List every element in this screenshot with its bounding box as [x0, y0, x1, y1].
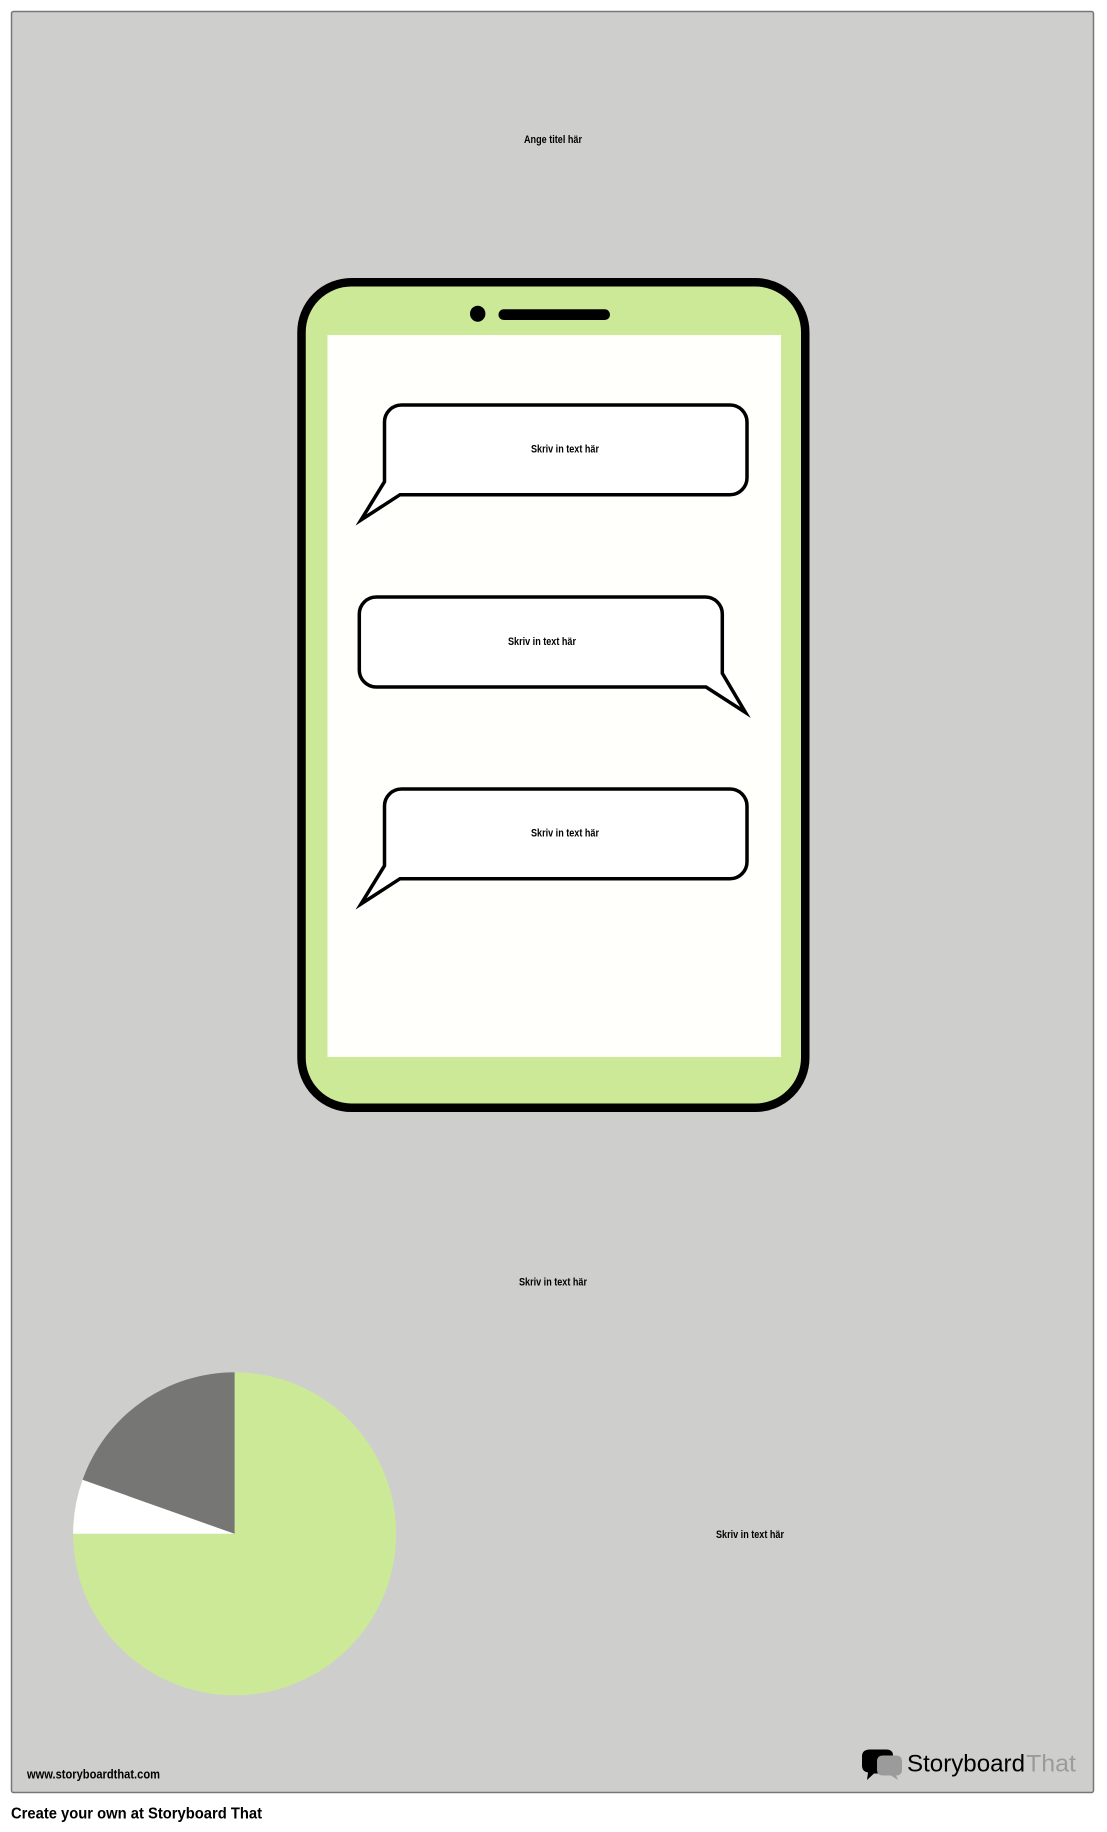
bubble text 1: Skriv in text här — [531, 444, 600, 456]
pie slice: white — [73, 1480, 235, 1534]
pie slice: gray — [83, 1372, 235, 1534]
phone body — [302, 282, 805, 1108]
Storyboard That logo — [862, 1750, 1076, 1780]
bubble text 3: Skriv in text här — [531, 828, 600, 840]
icon: phone speaker — [498, 309, 610, 320]
logo word: That: That — [1026, 1750, 1076, 1778]
text below phone: Skriv in text här — [519, 1276, 588, 1288]
pie chart caption: Skriv in text här — [716, 1529, 785, 1541]
footer call to action: Create your own at Storyboard That — [11, 1806, 263, 1822]
phone screen — [328, 335, 781, 1057]
logo word: Storyboard: Storyboard — [907, 1750, 1025, 1778]
icon: phone camera — [470, 306, 485, 322]
speech bubble 3 — [361, 789, 747, 904]
title: Ange titel här — [524, 134, 583, 146]
icon: gray speech bubble — [877, 1756, 902, 1780]
icon: black speech bubble — [862, 1750, 893, 1780]
website text: www.storyboardthat.com — [26, 1768, 160, 1782]
pie slice: green — [73, 1372, 396, 1695]
speech bubble 1 — [361, 405, 747, 520]
phone illustration — [302, 282, 805, 1108]
speech bubble 2 — [359, 597, 746, 712]
bubble text 2: Skriv in text här — [508, 636, 577, 648]
pie chart — [73, 1372, 396, 1695]
